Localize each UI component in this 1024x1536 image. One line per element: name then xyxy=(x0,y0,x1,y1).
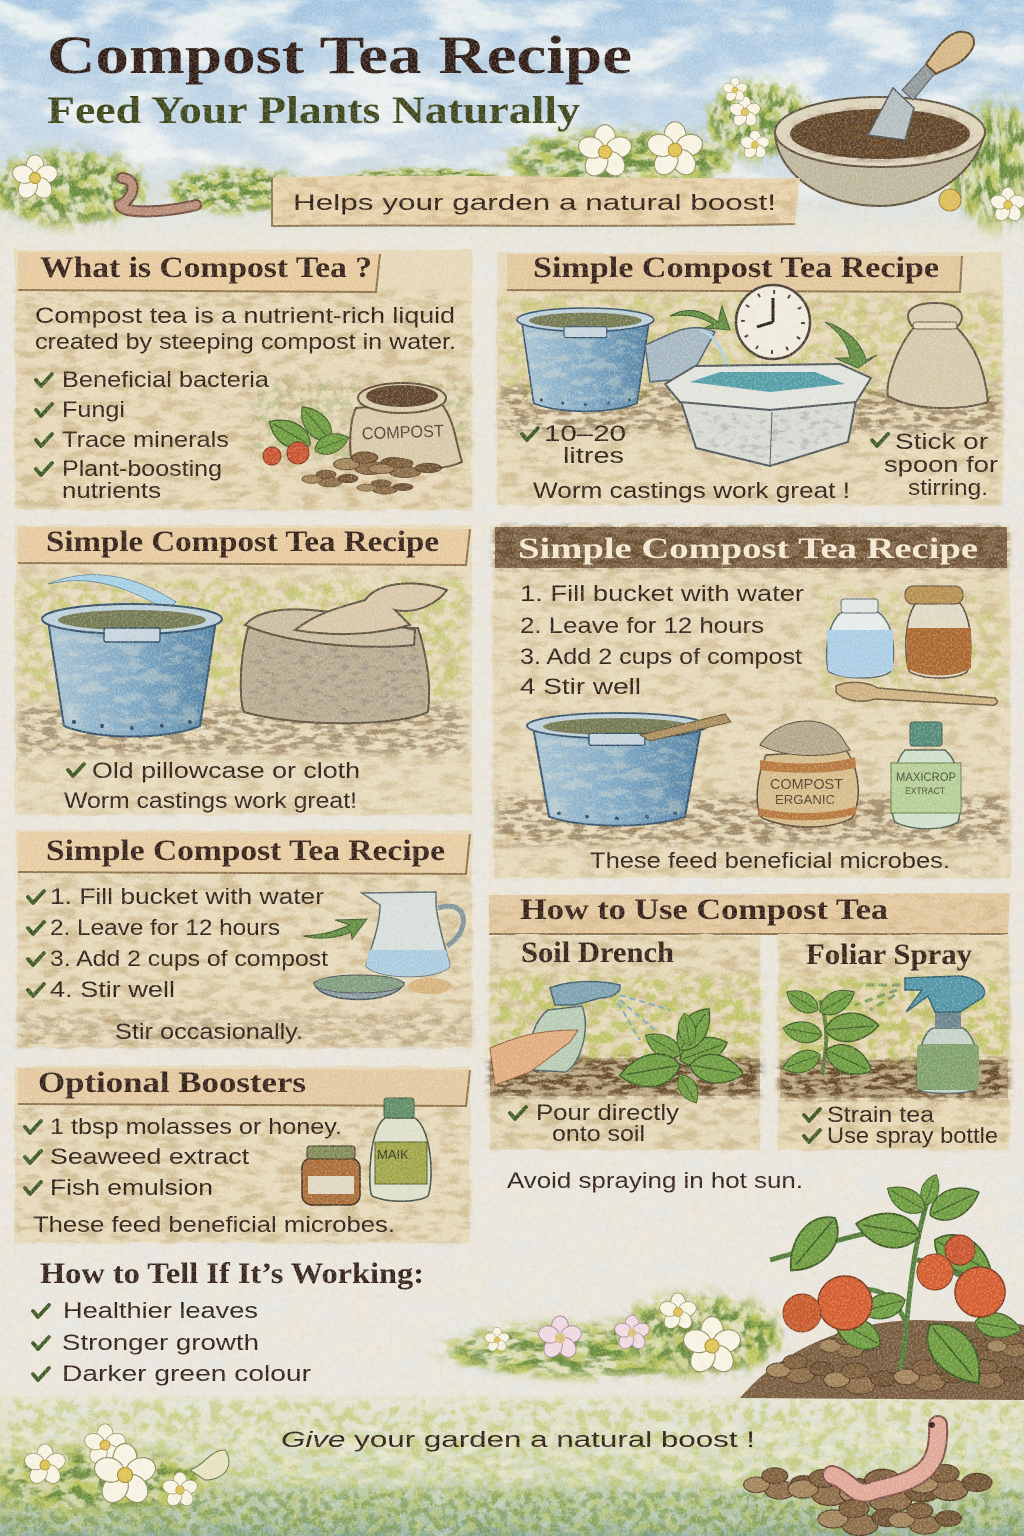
heading: dark wood band xyxy=(495,527,1007,568)
illustration: footer flowers xyxy=(0,1424,229,1514)
illustration: tomato plant on soil xyxy=(740,1172,1024,1400)
icon: compost sack and tomatoes: COMPOST xyxy=(361,421,444,443)
heading: working: How to Tell If It’s Working: xyxy=(40,1257,424,1290)
panel: optional boosters xyxy=(15,1066,470,1243)
heading: checklist recipe: Simple Compost Tea Recipe xyxy=(46,834,445,867)
heading: supplies xyxy=(507,251,962,292)
list: numbered steps: 3. Add 2 cups of compost xyxy=(520,644,802,669)
subtitle: Feed Your Plants Naturally xyxy=(47,89,581,132)
list: numbered steps: 1. Fill bucket with water xyxy=(520,581,804,606)
text: worm castings: Worm castings work great ! xyxy=(533,478,850,503)
list: boosters: Seaweed extract xyxy=(50,1144,249,1169)
label: soil drench: Soil Drench xyxy=(521,936,674,969)
checklist: contents: Trace minerals xyxy=(62,427,229,452)
sub-panel: foliar spray xyxy=(778,935,1010,1150)
icon: seaweed bottle xyxy=(891,722,961,829)
label: foliar spray: Foliar Spray xyxy=(806,938,972,971)
icon: green plant xyxy=(617,1001,746,1107)
section: how to tell if it's working xyxy=(33,1257,424,1386)
checklist: signs xyxy=(33,1298,311,1386)
icon: seaweed bottle: MAXICROP xyxy=(896,772,956,784)
text: litres: 10–20 xyxy=(544,421,626,446)
list: numbered steps: 4 Stir well xyxy=(520,674,641,699)
text: stir occasionally: Stir occasionally. xyxy=(115,1019,303,1044)
top garden border with flowers xyxy=(0,77,1024,227)
icon: blue bucket xyxy=(517,308,654,411)
list: checked steps: 1. Fill bucket with water xyxy=(50,884,324,909)
icon: compost sack and tomatoes xyxy=(263,383,462,494)
soil strip xyxy=(780,1060,1008,1098)
text: stick or spoon xyxy=(872,429,998,500)
footer text: Give your garden a natural boost ! xyxy=(281,1427,755,1452)
list: soil drench xyxy=(510,1100,679,1146)
list: numbered steps: 2. Leave for 12 hours xyxy=(520,613,764,638)
checklist: signs: Healthier leaves xyxy=(63,1298,258,1323)
text: pillowcase: Old pillowcase or cloth xyxy=(92,758,360,783)
text: microbes note: These feed beneficial microbes. xyxy=(590,848,950,873)
icon: clock xyxy=(736,285,810,359)
icon: glass pitcher xyxy=(362,892,463,976)
illustration: earthworm on soil xyxy=(744,1422,992,1536)
heading: simple recipe xyxy=(18,525,470,565)
heading: what is compost tea: What is Compost Tea ? xyxy=(40,251,372,284)
icon: spray bottle xyxy=(855,976,985,1094)
checklist: signs: Darker green colour xyxy=(62,1361,311,1386)
text: worm castings note: Worm castings work great! xyxy=(64,788,357,813)
soil strip xyxy=(490,1058,760,1096)
checklist: contents: Plant-boosting xyxy=(62,456,222,481)
heading: how to use: How to Use Compost Tea xyxy=(520,893,888,926)
title: Compost Tea Recipe xyxy=(47,25,632,85)
arrow: green leaf xyxy=(303,919,367,939)
text: definition xyxy=(35,303,456,354)
icon: bucket with stick xyxy=(527,713,731,826)
text: microbes: These feed beneficial microbes. xyxy=(33,1212,395,1237)
list: checked steps: 3. Add 2 cups of compost xyxy=(50,946,328,971)
heading: supplies: Simple Compost Tea Recipe xyxy=(533,251,939,284)
heading: what is compost tea xyxy=(18,251,380,292)
icon: wooden spoon xyxy=(836,682,997,705)
icon: tub of water xyxy=(665,364,871,466)
arrow: green curved right xyxy=(825,322,877,368)
text: stick or spoon: spoon for xyxy=(884,452,998,477)
icon: seaweed bottle small xyxy=(370,1098,431,1201)
panel: how to use compost tea xyxy=(489,893,1010,1193)
icon: water jar xyxy=(827,599,894,678)
icon: compost bowl with trowel xyxy=(775,32,985,206)
list: soil drench: Pour directly xyxy=(536,1100,679,1125)
panel: checklist recipe xyxy=(17,830,472,1048)
checklist: contents: Fungi xyxy=(62,397,125,422)
heading: checklist recipe xyxy=(18,832,470,874)
icon: seaweed bottle: EXTRACT xyxy=(905,786,945,796)
list: foliar spray: Use spray bottle xyxy=(827,1123,998,1148)
heading: simple recipe: Simple Compost Tea Recipe xyxy=(46,525,439,558)
heading: boosters: Optional Boosters xyxy=(38,1066,306,1099)
icon: water pour xyxy=(48,575,176,611)
list: checked steps: 4. Stir well xyxy=(50,977,175,1002)
soil strip xyxy=(497,795,1007,845)
arrow: green curved left xyxy=(670,306,730,330)
heading: boosters xyxy=(18,1066,470,1106)
icon: worm top left xyxy=(120,178,196,211)
list: foliar spray: Strain tea xyxy=(827,1102,935,1127)
text: stick or spoon: Stick or xyxy=(895,429,988,454)
text: stick or spoon: stirring. xyxy=(908,475,988,500)
ground xyxy=(20,705,465,755)
icon: compost jar xyxy=(757,721,858,827)
checklist: contents: nutrients xyxy=(62,478,161,503)
icon: cloth bag xyxy=(887,303,988,408)
checklist: contents xyxy=(36,367,270,503)
sub-panel: soil drench xyxy=(490,935,760,1150)
list: numbered steps xyxy=(520,581,804,699)
text: definition: created by steeping compost in water. xyxy=(35,329,456,354)
icon: amber jar xyxy=(905,586,971,678)
icon: compost jar: COMPOST xyxy=(770,776,843,793)
icon: bowl of compost xyxy=(314,975,452,1000)
list: boosters: 1 tbsp molasses or honey. xyxy=(50,1114,342,1139)
list: checked steps xyxy=(28,884,328,1002)
list: boosters xyxy=(25,1114,342,1200)
heading: dark wood band: Simple Compost Tea Recipe xyxy=(518,532,978,565)
text: litres xyxy=(522,421,626,468)
icon: hand with sprayer xyxy=(490,982,670,1085)
text: litres: litres xyxy=(563,443,624,468)
panel: what is compost tea xyxy=(15,250,472,510)
checklist: signs: Stronger growth xyxy=(62,1330,259,1355)
icon: seaweed bottle small: MAIK xyxy=(377,1147,409,1162)
panel: steps with jars xyxy=(493,525,1010,878)
list: soil drench: onto soil xyxy=(552,1121,645,1146)
text: definition: Compost tea is a nutrient-rich liquid xyxy=(35,303,455,328)
checklist: contents: Beneficial bacteria xyxy=(62,367,270,392)
list: boosters: Fish emulsion xyxy=(50,1175,213,1200)
heading: how to use xyxy=(489,893,1010,934)
icon: large bucket xyxy=(42,604,222,736)
icon: cloth sack xyxy=(241,583,447,723)
banner: natural boost: Helps your garden a natural boost! xyxy=(293,190,776,215)
icon: molasses jar xyxy=(302,1146,360,1205)
banner: natural boost xyxy=(272,176,800,226)
icon: compost jar: ERGANIC xyxy=(775,792,835,807)
icon: leafy seedling xyxy=(779,983,880,1083)
list: foliar spray xyxy=(804,1102,998,1148)
panel: bucket and cloth xyxy=(15,525,472,815)
text: avoid hot sun: Avoid spraying in hot sun. xyxy=(507,1168,803,1193)
list: checked steps: 2. Leave for 12 hours xyxy=(50,915,280,940)
soil band xyxy=(500,385,1000,433)
illustration: flower border mid xyxy=(441,1293,787,1379)
panel: supplies recipe xyxy=(497,251,1003,505)
icon: watering jug pouring xyxy=(645,328,728,382)
